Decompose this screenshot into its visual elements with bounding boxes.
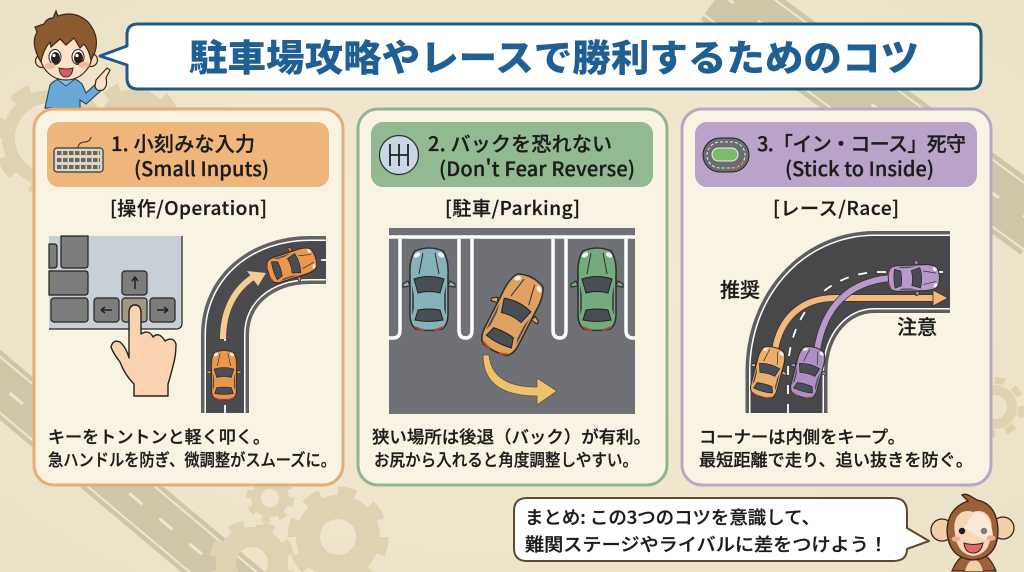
illustration: parking lot <box>389 228 635 414</box>
header: stick to inside <box>695 122 977 187</box>
illustration: arrow keys and finger <box>49 236 182 396</box>
header: small inputs: (Small Inputs) <box>134 153 269 182</box>
header: small inputs: 1. 小刻みな入力 <box>111 128 255 157</box>
icon: race track <box>703 138 749 172</box>
header: don't fear reverse <box>371 122 653 187</box>
body text: parking: 狭い場所は後退（バック）が有利。 <box>372 423 651 448</box>
illustration: race corner <box>720 259 950 413</box>
panel: small inputs <box>34 109 343 485</box>
body text: parking <box>372 423 651 471</box>
summary speech bubble <box>514 498 929 561</box>
body text: small inputs: 急ハンドルを防ぎ、微調整がスムーズに。 <box>48 446 336 471</box>
summary text: まとめ: この3つのコツを意識して、 <box>525 504 820 530</box>
label: recommended: 推奨 <box>720 274 760 303</box>
header: don't fear reverse: (Don't Fear Reverse) <box>439 153 635 182</box>
header: don't fear reverse: 2. バックを恐れない <box>428 128 612 157</box>
section label: parking: [駐車/Parking] <box>445 194 580 221</box>
label: caution: 注意 <box>897 311 937 340</box>
section label: race: [レース/Race] <box>773 194 899 221</box>
body text: small inputs: キーをトントンと軽く叩く。 <box>48 423 270 448</box>
panel: stick to inside <box>682 109 991 485</box>
icon: gear shift <box>380 136 418 174</box>
character: monkey <box>931 494 1014 571</box>
summary speech bubble: 難関ステージやライバルに差をつけよう！ <box>525 531 888 557</box>
panel: don't fear reverse <box>358 109 667 485</box>
body text: small inputs <box>48 423 336 471</box>
body text: race <box>699 423 973 471</box>
title text: 駐車場攻略やレースで勝利するためのコツ <box>189 28 919 82</box>
icon: keyboard <box>54 137 103 172</box>
section label: operation: [操作/Operation] <box>110 194 267 221</box>
body text: race: コーナーは内側をキープ。 <box>699 423 905 448</box>
header: stick to inside: 3.「イン・コース」死守 <box>757 128 966 157</box>
arrow: reverse direction <box>483 355 557 405</box>
illustration: road with car <box>207 241 326 413</box>
hand <box>111 305 176 396</box>
header: small inputs <box>47 122 329 187</box>
title banner <box>100 24 981 89</box>
character: boy pointing <box>34 11 110 108</box>
body text: parking: お尻から入れると角度調整しやすい。 <box>374 446 638 471</box>
body text: race: 最短距離で走り、追い抜きを防ぐ。 <box>699 446 973 471</box>
header: stick to inside: (Stick to Inside) <box>785 153 934 182</box>
